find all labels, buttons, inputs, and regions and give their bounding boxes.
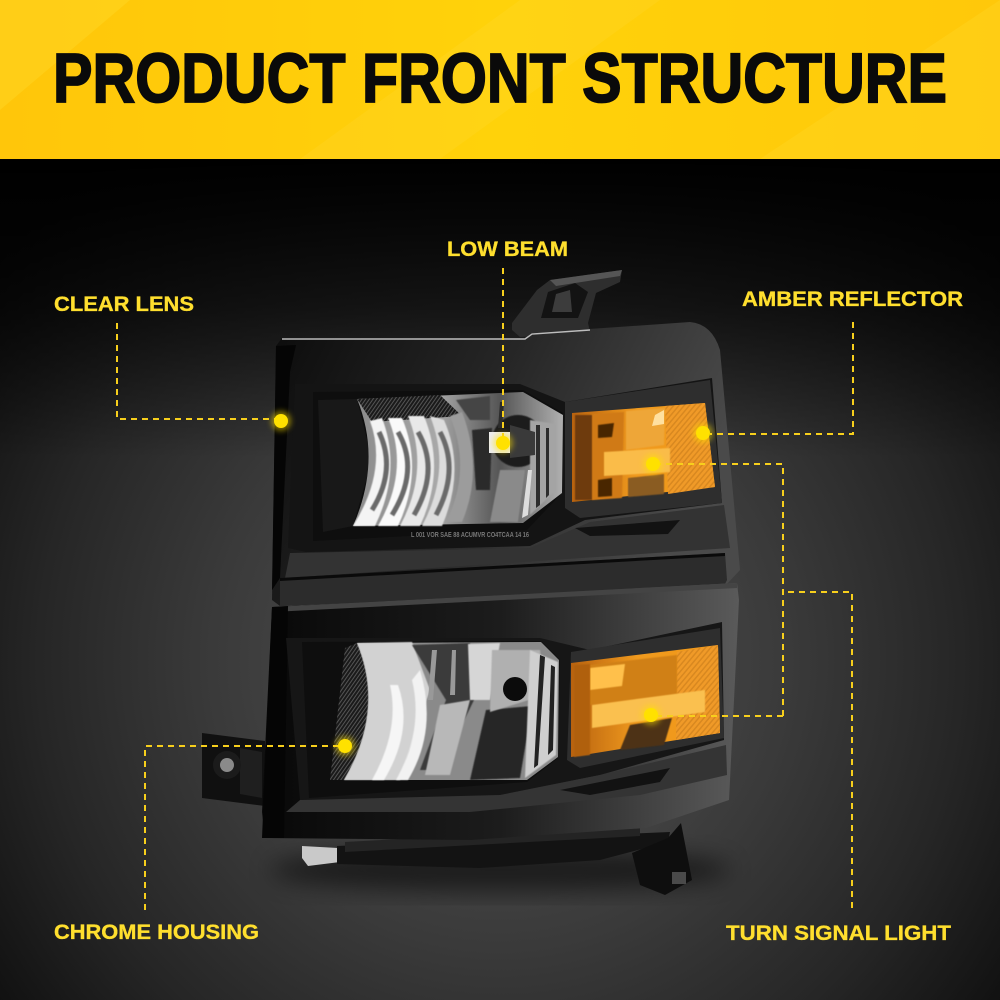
lower amber lens — [567, 628, 724, 768]
lower clear lens — [302, 641, 560, 798]
upper lamp housing — [272, 322, 740, 606]
callout: chrome housing: CHROME HOUSING — [54, 920, 259, 944]
upper amber reflector — [565, 380, 722, 518]
callout: chrome housing — [54, 736, 355, 944]
top mounting bracket — [512, 270, 622, 337]
lower dark recess — [286, 622, 724, 800]
callout: amber reflector: AMBER REFLECTOR — [742, 287, 963, 311]
crescent shading — [372, 432, 449, 515]
callout: low beam — [447, 237, 568, 453]
upper dark recess — [288, 378, 722, 552]
callout: low beam: LOW BEAM — [447, 237, 568, 261]
callout: turn signal light — [641, 454, 951, 945]
callout: clear lens — [54, 292, 291, 431]
callout: amber reflector — [693, 287, 963, 443]
left lower bracket — [202, 733, 265, 806]
bottom hardware — [302, 823, 692, 895]
callout: turn signal light: TURN SIGNAL LIGHT — [726, 921, 951, 945]
floor shadow — [270, 848, 730, 892]
upper clear lens — [313, 390, 563, 541]
callout: clear lens: CLEAR LENS — [54, 292, 194, 316]
lower lamp housing — [262, 583, 739, 840]
header banner — [0, 0, 1000, 159]
upper clear lens: L 001 VOR SAE 88 ACUMVR CO4TCAA 14 16 — [411, 532, 529, 539]
upper strip — [280, 553, 727, 606]
headlight assembly — [202, 270, 740, 895]
